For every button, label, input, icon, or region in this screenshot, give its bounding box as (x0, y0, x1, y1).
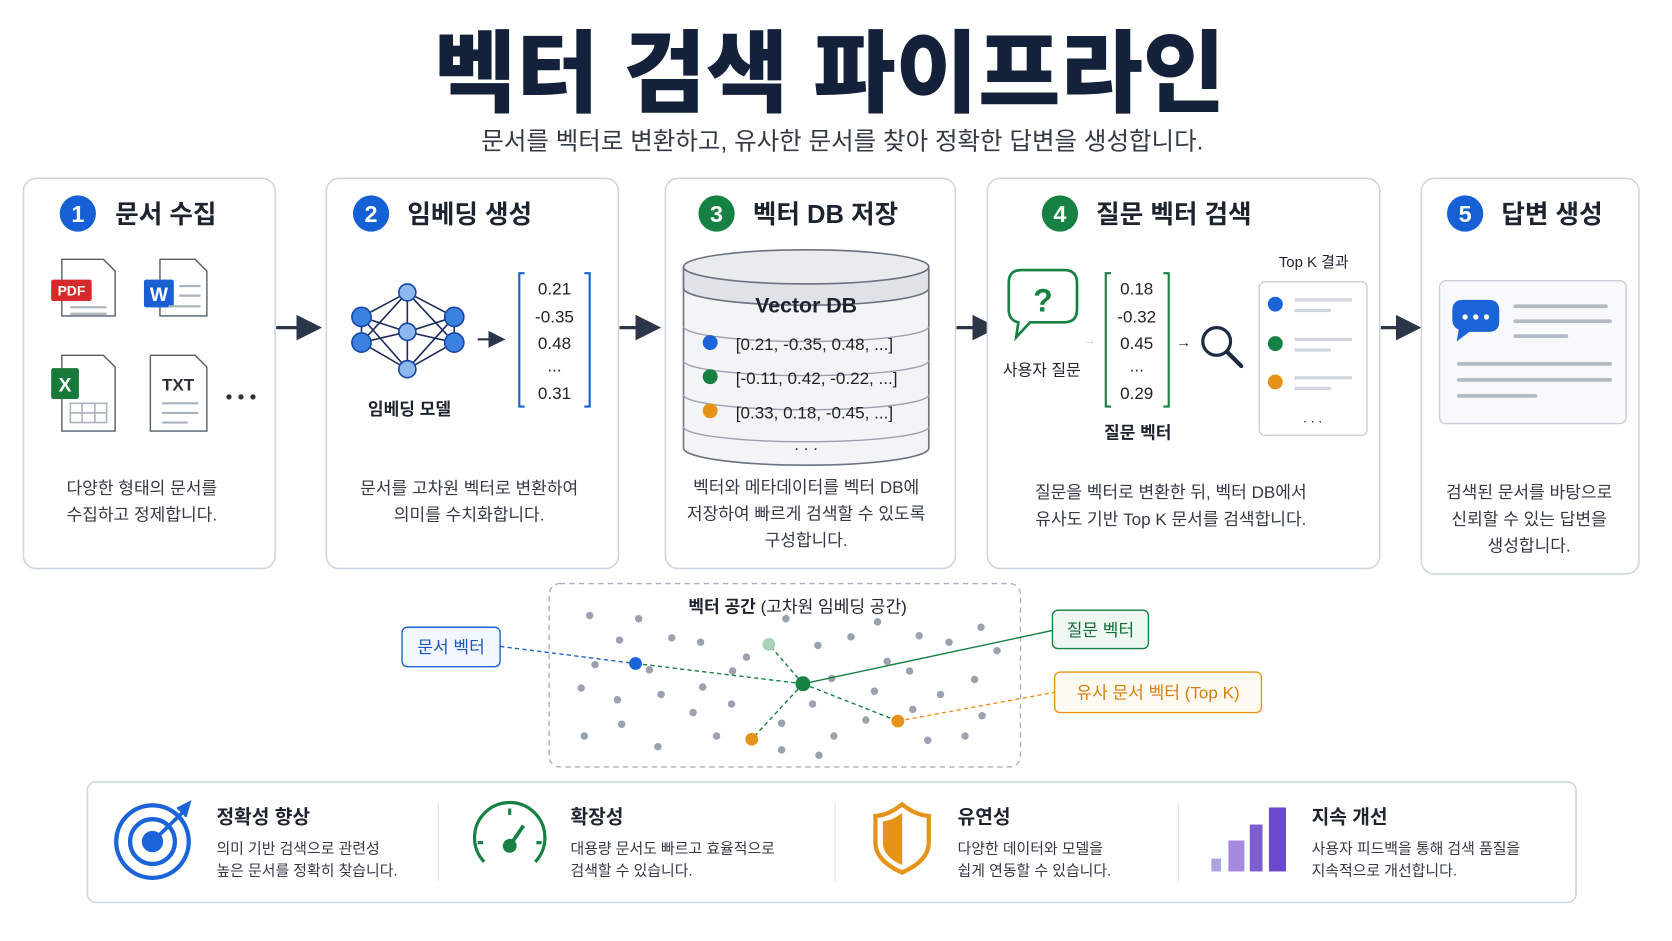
arrow 4-5 (1381, 326, 1415, 329)
panel: benefits: 다양한 데이터와 모델을 (958, 840, 1103, 857)
icon: database cylinder (684, 250, 929, 465)
icon: database cylinder: [0.33, 0.18, -0.45, ...] (736, 403, 893, 422)
panel: 벡터 DB 저장: 구성합니다. (765, 531, 848, 550)
icon: Word doc: W (150, 285, 169, 306)
panel: benefits: 쉽게 연동할 수 있습니다. (958, 863, 1111, 880)
vector bracket: 0.21 (538, 280, 571, 299)
panel: 문서 수집: • • • (226, 387, 256, 408)
panel: benefits: 확장성 (570, 806, 623, 828)
panel: 질문 벡터 검색: 질문 벡터 (1104, 424, 1172, 443)
panel: 문서 수집: 수집하고 정제합니다. (67, 506, 217, 525)
panel: 질문 벡터 검색: 질문을 벡터로 변환한 뒤, 벡터 DB에서 (1035, 483, 1307, 502)
vector bracket: ... (547, 356, 562, 375)
panel: 임베딩 생성: 임베딩 모델 (368, 400, 451, 419)
panel: benefits: 정확성 향상 (216, 806, 310, 828)
panel: 답변 생성: 검색된 문서를 바탕으로 (1446, 483, 1612, 502)
panel: 답변 생성: 신뢰할 수 있는 답변을 (1451, 510, 1607, 529)
chart: vector space (500, 584, 1055, 767)
chart: vector space: 벡터 공간 (고차원 임베딩 공간) (688, 597, 907, 616)
panel: benefits: 사용자 피드백을 통해 검색 품질을 (1312, 840, 1520, 857)
icon: TXT doc (150, 355, 207, 431)
question vector: 0.45 (1120, 334, 1153, 353)
icon: magnifier (1203, 328, 1241, 366)
icon: database cylinder: [0.21, -0.35, 0.48, ...] (736, 335, 893, 354)
panel: 답변 생성: 답변 생성 (1501, 200, 1603, 229)
panel: 벡터 DB 저장: 3 (710, 201, 723, 227)
callout: 문서 벡터 (402, 627, 500, 667)
callout: 유사 문서 벡터 (1055, 672, 1261, 713)
vector bracket: 0.48 (538, 334, 571, 353)
icon: PDF doc (51, 259, 115, 316)
badge 2 (353, 195, 389, 232)
panel: 답변 생성: 생성합니다. (1488, 537, 1571, 556)
description: 다양한 형태의 문서를 (67, 479, 217, 498)
icon: database cylinder: . . . (794, 435, 818, 454)
question vector: 0.29 (1120, 384, 1153, 403)
badge 2: 2 (365, 201, 378, 227)
panel: 질문 벡터 검색: 사용자 질문 (1003, 362, 1081, 380)
panel: benefits: 지속적으로 개선합니다. (1312, 863, 1457, 880)
question vector: 0.18 (1120, 280, 1153, 299)
panel: 질문 벡터 검색: 질문 벡터 검색 (1096, 200, 1252, 229)
panel: 임베딩 생성: 임베딩 생성 (407, 200, 532, 229)
panel: 임베딩 생성 (326, 178, 618, 569)
icon: TXT doc: TXT (162, 376, 195, 395)
panel: 질문 벡터 검색: → (1083, 333, 1096, 348)
heading: 문서 수집 (115, 200, 216, 229)
icon: bar chart (1211, 807, 1286, 871)
panel: benefits (87, 782, 1576, 902)
panel: benefits: 유연성 (958, 806, 1011, 828)
title: 벡터 검색 파이프라인 (434, 24, 1225, 124)
panel: 질문 벡터 검색: → (1176, 334, 1191, 351)
vector bracket: -0.35 (535, 307, 574, 326)
callout: 유사 문서 벡터: 유사 문서 벡터 (Top K) (1076, 684, 1240, 703)
icon: target (116, 802, 190, 878)
panel: benefits: 대용량 문서도 빠르고 효율적으로 (570, 840, 775, 857)
question vector (1106, 273, 1169, 407)
vector bracket (519, 273, 590, 407)
panel: 질문 벡터 검색: 4 (1053, 201, 1066, 227)
arrow 3-4 (956, 326, 992, 329)
icon: database cylinder: [-0.11, 0.42, -0.22, ...] (736, 369, 897, 388)
answer card (1440, 281, 1626, 424)
question vector: -0.32 (1117, 307, 1156, 326)
vector bracket: 0.31 (538, 384, 571, 403)
callout: 질문 벡터 (1052, 610, 1148, 649)
question vector: ... (1130, 356, 1144, 375)
icon: shield (875, 804, 929, 873)
callout: 문서 벡터: 문서 벡터 (417, 638, 485, 657)
panel: 답변 생성 (1421, 178, 1639, 574)
panel: benefits: 높은 문서를 정확히 찾습니다. (216, 863, 398, 880)
icon: Word doc (144, 259, 207, 316)
panel: 임베딩 생성: 의미를 수치화합니다. (394, 506, 544, 525)
icon: neural network (352, 284, 464, 378)
panel: 벡터 DB 저장 (665, 178, 955, 569)
panel: 문서 수집 (23, 178, 275, 569)
icon: Excel doc: X (59, 376, 72, 397)
panel: 질문 벡터 검색 (987, 178, 1380, 569)
icon: gauge (475, 803, 545, 862)
panel: benefits: 의미 기반 검색으로 관련성 (216, 840, 380, 857)
icon: question bubble: ? (1033, 283, 1053, 319)
icon: database cylinder: Vector DB (755, 294, 857, 318)
subtitle: 문서를 벡터로 변환하고, 유사한 문서를 찾아 정확한 답변을 생성합니다. (481, 128, 1203, 156)
panel: 답변 생성: 5 (1459, 201, 1472, 227)
icon: Excel doc (51, 355, 115, 431)
icon: PDF doc: PDF (58, 283, 85, 299)
panel: benefits: 검색할 수 있습니다. (570, 863, 693, 880)
arrow 1-2 (276, 326, 316, 329)
badge 1: 1 (71, 201, 84, 227)
badge 1 (60, 195, 96, 232)
panel: benefits: 지속 개선 (1312, 806, 1388, 828)
panel: 임베딩 생성: 문서를 고차원 벡터로 변환하여 (360, 479, 578, 498)
panel: 벡터 DB 저장: 저장하여 빠르게 검색할 수 있도록 (687, 505, 925, 524)
icon: question bubble (1009, 270, 1077, 337)
panel: 벡터 DB 저장: 벡터와 메타데이터를 벡터 DB에 (693, 478, 919, 497)
panel: 질문 벡터 검색: Top K 결과 (1279, 254, 1349, 271)
Top K result card: . . . (1303, 410, 1322, 426)
panel: 질문 벡터 검색: 유사도 기반 Top K 문서를 검색합니다. (1035, 510, 1306, 529)
Top K result card (1259, 282, 1367, 435)
panel: 벡터 DB 저장: 벡터 DB 저장 (753, 200, 898, 229)
callout: 질문 벡터: 질문 벡터 (1067, 621, 1134, 640)
arrow 2-3 (620, 326, 655, 329)
